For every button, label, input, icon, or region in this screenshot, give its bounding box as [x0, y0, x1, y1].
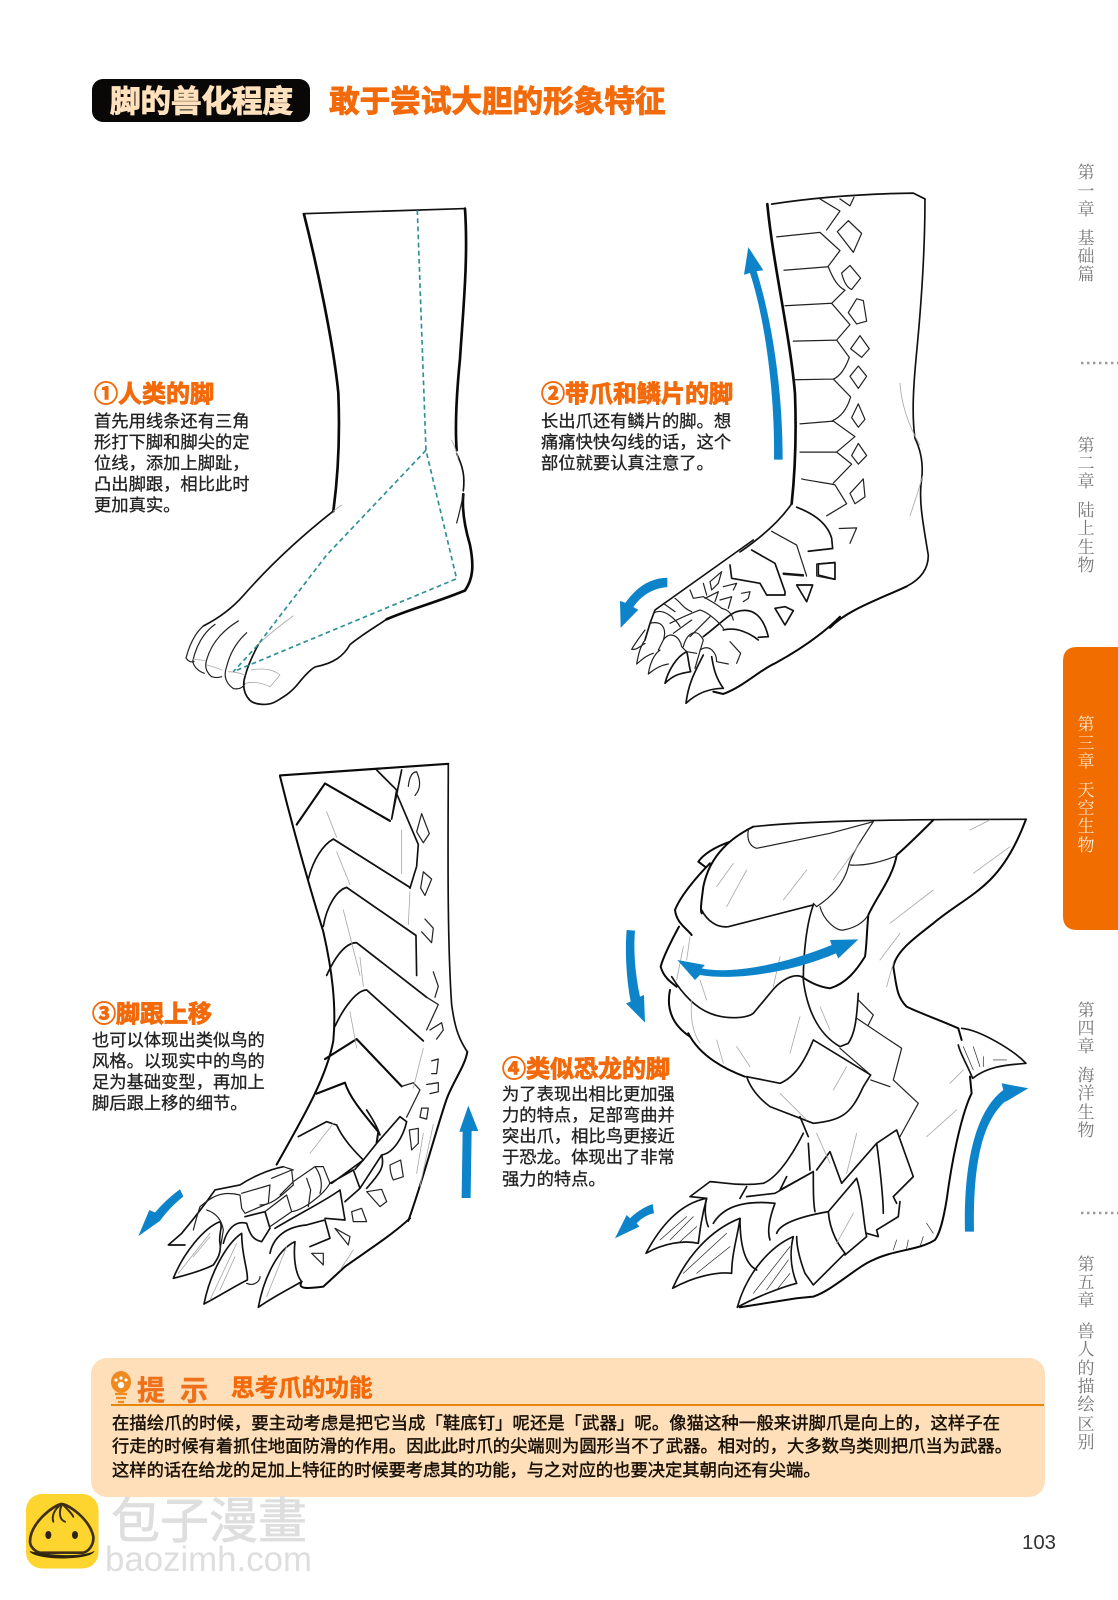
title badge	[92, 79, 310, 122]
icon: yellow bun	[26, 1494, 98, 1568]
heading 2: ②带爪和鳞片的脚	[541, 381, 733, 408]
chapter 1 label: 第	[1078, 163, 1094, 182]
title badge: 脚的兽化程度	[110, 85, 293, 119]
body 3	[92, 1030, 265, 1113]
text block: step 2 clawed foot	[541, 381, 733, 473]
chapter 5 label: 别	[1078, 1433, 1094, 1452]
chapter 1 label: 础	[1078, 247, 1094, 266]
chapter 3 label	[1078, 715, 1094, 855]
body 1: 形打下脚和脚尖的定	[94, 432, 250, 452]
arrow: toes	[138, 1189, 183, 1236]
chapter 5 label: 区	[1078, 1415, 1094, 1434]
body 1	[94, 411, 250, 515]
chapter 3 label: 第	[1078, 715, 1094, 734]
text block: step 4 dinosaur foot	[502, 1056, 675, 1189]
arrow: double-headed across leg	[677, 939, 858, 980]
chapter 2 label: 第	[1078, 436, 1094, 455]
hint body text: 行走的时候有着抓住地面防滑的作用。因此此时爪的尖端则为圆形当不了武器。相对的，大多数鸟类则把爪当为武器。	[112, 1436, 1012, 1456]
arrow: upward	[744, 247, 783, 460]
leg and scales	[620, 193, 928, 628]
body 4: 于恐龙。体现出了非常	[502, 1147, 675, 1167]
text block: step 1 human foot	[94, 381, 250, 515]
body 4: 突出爪，相比鸟更接近	[502, 1126, 675, 1146]
toes and claws	[632, 540, 840, 703]
body 3: 也可以体现出类似鸟的	[92, 1030, 265, 1050]
active chapter tab	[1063, 647, 1118, 930]
chapter 4 label	[1078, 1001, 1094, 1140]
hint heading: 思考爪的功能	[231, 1375, 373, 1402]
sidebar: chapter navigation	[1063, 163, 1118, 1452]
chapter 5 label: 章	[1078, 1290, 1094, 1310]
body 4	[502, 1084, 675, 1189]
chapter 5 label: 绘	[1078, 1395, 1094, 1414]
chapter 1 label: 章	[1078, 199, 1094, 219]
arrow: upward right	[965, 1083, 1028, 1232]
body 2	[541, 411, 731, 473]
arrow: toes	[620, 578, 667, 628]
panel: human foot illustration	[186, 209, 472, 704]
chapter 3 label: 空	[1078, 799, 1094, 818]
chapter 4 label: 物	[1078, 1121, 1094, 1140]
hint label: 提示	[137, 1375, 223, 1406]
text block: step 3 raised heel	[92, 1001, 265, 1113]
chapter 4 label: 四	[1078, 1019, 1094, 1038]
chapter 4 label: 海	[1078, 1066, 1094, 1085]
arrow: downward left	[626, 930, 645, 1023]
panel: raised heel foot illustration	[138, 764, 478, 1307]
chapter 3 label: 章	[1078, 751, 1094, 771]
chapter 1 label: 基	[1078, 229, 1094, 248]
panel: dinosaur foot illustration	[615, 819, 1028, 1307]
watermark url: baozimh.com	[105, 1540, 312, 1579]
chapter 5 label: 的	[1078, 1359, 1094, 1378]
chapter 2 label: 二	[1078, 454, 1094, 473]
arrow: toes	[615, 1204, 654, 1238]
chapter 1 label	[1078, 163, 1094, 284]
chapter 2 label: 陆	[1078, 500, 1094, 520]
icon: light bulb with paw	[111, 1371, 131, 1402]
chapter 5 label	[1078, 1255, 1094, 1452]
teal construction lines	[233, 210, 457, 672]
chapter 5 label: 人	[1078, 1340, 1094, 1359]
body 2: 痛痛快快勾线的话，这个	[541, 432, 731, 452]
panel: clawed scaled foot illustration	[620, 193, 928, 703]
watermark: baozimh logo	[26, 1494, 312, 1579]
body 3: 足为基础变型，再加上	[92, 1072, 265, 1092]
hint body text: 在描绘爪的时候，要主动考虑是把它当成「鞋底钉」呢还是「武器」呢。像猫这种一般来讲脚爪是向上的，这样子在	[112, 1413, 1000, 1433]
panel: hint box	[91, 1358, 1045, 1497]
chapter 2 label: 物	[1078, 556, 1094, 575]
body 1: 位线，添加上脚趾，	[94, 453, 250, 473]
title subheading: 敢于尝试大胆的形象特征	[329, 85, 666, 119]
chapter 2 label: 上	[1078, 519, 1094, 538]
chapter 3 label: 生	[1078, 817, 1094, 836]
body 4: 力的特点，足部弯曲并	[502, 1105, 675, 1125]
body 3: 风格。以现实中的鸟的	[92, 1051, 265, 1071]
body 4: 强力的特点。	[502, 1169, 606, 1189]
chapter 5 label: 第	[1078, 1255, 1094, 1274]
chapter 5 label: 兽	[1078, 1322, 1094, 1341]
body 2: 部位就要认真注意了。	[541, 453, 714, 473]
hint body text: 这样的话在给龙的足加上特征的时候要考虑其的功能，与之对应的也要决定其朝向还有尖端。	[112, 1460, 821, 1480]
chapter 5 label: 五	[1078, 1273, 1094, 1292]
chapter 4 label: 洋	[1078, 1084, 1094, 1103]
body 1: 首先用线条还有三角	[94, 411, 250, 431]
heading 1: ①人类的脚	[94, 381, 214, 408]
chapter 1 label: 篇	[1078, 265, 1094, 284]
chapter 4 label: 章	[1078, 1036, 1094, 1056]
body 2: 长出爪还有鳞片的脚。想	[541, 411, 731, 431]
watermark chinese name: 包子漫畫	[111, 1495, 307, 1549]
toes and claws	[168, 1110, 423, 1307]
chapter 4 label: 第	[1078, 1001, 1094, 1020]
chapter 2 label: 生	[1078, 538, 1094, 557]
arrow: heel upward	[459, 1106, 478, 1198]
chapter 3 label: 物	[1078, 836, 1094, 855]
heading 3: ③脚跟上移	[92, 1001, 212, 1028]
chapter 2 label	[1078, 436, 1094, 575]
body 3: 脚后跟上移的细节。	[92, 1093, 248, 1113]
chapter 5 label: 描	[1078, 1377, 1094, 1396]
chapter 2 label: 章	[1078, 471, 1094, 491]
page number: 103	[1022, 1532, 1056, 1554]
hint body text	[112, 1413, 1012, 1480]
chapter 3 label: 天	[1078, 781, 1094, 800]
chapter 4 label: 生	[1078, 1103, 1094, 1122]
heading 4: ④类似恐龙的脚	[502, 1056, 670, 1083]
chapter 3 label: 三	[1078, 734, 1094, 753]
body 4: 为了表现出相比更加强	[502, 1084, 675, 1104]
leg plates	[138, 764, 478, 1236]
body 1: 凸出脚跟，相比此时	[94, 474, 250, 494]
chapter 1 label: 一	[1078, 182, 1094, 201]
title	[92, 79, 666, 122]
body 1: 更加真实。	[94, 495, 180, 515]
